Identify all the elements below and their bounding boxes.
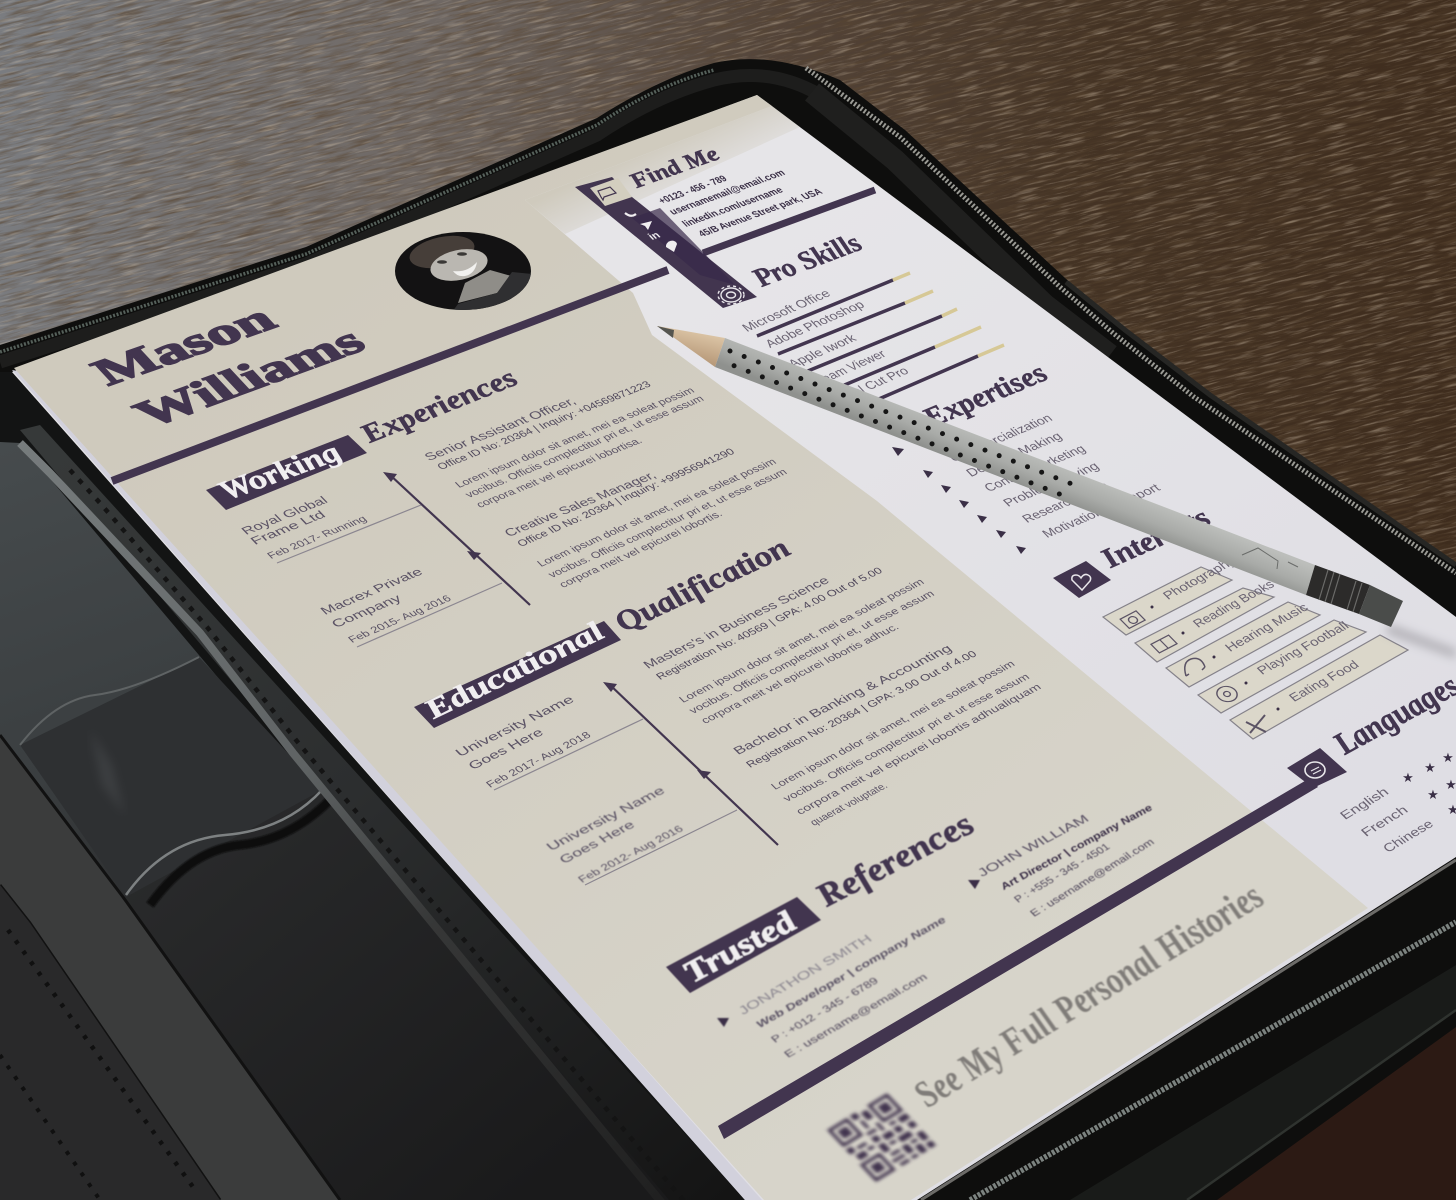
section heading: Working Experiences: Working	[209, 437, 349, 505]
education schools: Feb 2017- Aug 2018	[484, 730, 594, 790]
name: Mason Williams: Mason	[82, 298, 286, 393]
leather folder interior	[0, 372, 745, 1200]
strap	[0, 735, 340, 1200]
interest: hearing music	[1166, 600, 1320, 687]
main horizontal rule	[112, 270, 668, 481]
pencil dots	[727, 351, 1072, 497]
pro skills list: Final Cut Pro	[832, 364, 912, 405]
working details: corpora meit vel epicurei lobortisa.	[474, 436, 645, 510]
working companies: Frame Ltd	[247, 508, 329, 547]
reference: John William: E : username@email.com	[1028, 836, 1157, 919]
languages list: English	[1337, 785, 1392, 822]
education details: Registration No: 20364 | GPA: 3.00 Out of 4.00	[744, 649, 980, 770]
education schools: Feb 2012- Aug 2016	[576, 824, 686, 885]
reference: Jonathon Smith: Web Developer | company Name	[754, 915, 949, 1030]
zipper, right	[806, 68, 1456, 573]
education schools: University Name	[543, 784, 668, 853]
find me vertical band	[575, 177, 757, 308]
expertises list: Commercialization	[946, 411, 1055, 464]
name: Mason Williams	[82, 298, 375, 435]
working companies	[238, 494, 454, 645]
rating stars: ★	[1427, 787, 1439, 802]
education details	[640, 566, 1044, 828]
section heading: Educational Qualification: Qualification	[606, 532, 798, 637]
working details	[421, 380, 790, 590]
interest: playing football	[1198, 619, 1366, 713]
dark wood at bottom right corner	[1217, 1027, 1456, 1200]
pro skills list: Apple Iwork	[785, 331, 860, 370]
call to action: See My Full Personal Histories: See My Full Personal Histories	[903, 876, 1273, 1115]
expertises list: Content Marketing	[981, 442, 1089, 494]
paper edge	[12, 370, 762, 1200]
pro skills list: Microsoft Office	[739, 287, 833, 334]
pro skills list	[739, 273, 1004, 405]
section heading: Educational Qualification	[414, 532, 798, 728]
working details: Office ID No: 20364 | Inquiry: +04569871223	[435, 380, 654, 472]
reference: Jonathon Smith	[717, 915, 949, 1060]
pencil eraser	[1359, 585, 1403, 627]
working companies: Macrex Private	[317, 566, 426, 617]
icon: gear	[718, 286, 744, 304]
contact details: linkedin.com/username	[680, 186, 786, 229]
education details: vocibus. Officiis complectitur pri et ut esse assum	[781, 672, 1033, 804]
pencil body	[715, 338, 1315, 595]
working details: Office ID No: 20364 | Inquiry: +99956941290	[515, 447, 738, 549]
interest: eating food: Eating Food	[1286, 658, 1362, 704]
contact details: usernamemail@email.com	[667, 168, 788, 217]
education schools: Goes Here	[465, 726, 547, 772]
pencil shadow	[1385, 625, 1456, 658]
icon: heart box	[1053, 561, 1111, 598]
section heading: Trusted References	[666, 807, 983, 993]
education details: Lorem ipsum dolor sit amet, mei ea soleat possim	[677, 577, 927, 705]
education schools: Goes Here	[556, 818, 638, 866]
working companies: Feb 2017- Running	[265, 515, 370, 561]
interest: hearing music: Hearing Music	[1222, 600, 1312, 654]
interest: eating food	[1230, 635, 1408, 739]
icon: phone	[625, 213, 636, 216]
contact details	[656, 168, 826, 239]
section heading: Trusted References: References	[806, 807, 983, 913]
pen loop	[20, 657, 322, 897]
working details: Creative Sales Manager,	[501, 469, 659, 539]
working details: vocibus. Officiis complectitur pri et, ut esse assum	[546, 467, 790, 580]
working companies: Feb 2015- Aug 2016	[346, 594, 454, 645]
pencil tip	[657, 326, 725, 367]
heading: Expertises: Expertises	[913, 358, 1055, 432]
expertises list: Research Skills	[1019, 479, 1112, 525]
education details: corpora meit vel epicurei lobortis adhualiquam	[794, 682, 1044, 817]
contact details: +0123 - 456 - 789	[656, 174, 730, 206]
pro skills list: Adobe Photoshop	[762, 298, 867, 350]
profile photo	[395, 232, 531, 310]
education details: Registration No: 40569 | GPA: 4.00 Out of 5.00	[654, 566, 885, 682]
section heading: Trusted References: Trusted	[674, 905, 805, 988]
education details: Bachelor in Banking & Accounting	[730, 642, 955, 757]
find me rule	[703, 190, 875, 253]
folder seam, bottom right	[1070, 965, 1456, 1200]
working details: Senior Assistant Officer,	[421, 395, 579, 463]
expertises list: Motivational Support	[1039, 481, 1164, 540]
QR code	[827, 1093, 936, 1182]
languages list	[1337, 750, 1456, 855]
education details: Masters's in Business Science	[640, 574, 832, 671]
education schools	[452, 693, 686, 885]
name: Mason Williams: Williams	[123, 319, 375, 435]
rating stars	[1402, 750, 1456, 817]
working details: vocibus. Officiis complectitur pri et, ut esse assum	[463, 394, 707, 500]
reference: Jonathon Smith: JONATHON SMITH	[735, 932, 875, 1017]
pencil ferrule	[1306, 565, 1370, 614]
section heading: Working Experiences	[206, 364, 525, 510]
reference: John William: P : +555 - 345 - 4501	[1012, 842, 1113, 905]
interest: playing football: Playing Football	[1254, 619, 1352, 677]
languages list: French	[1358, 803, 1411, 839]
interests list	[1103, 554, 1408, 739]
reference: John William: Art Director | company Name	[997, 803, 1156, 893]
stitched band along paper	[20, 425, 745, 1200]
working timeline	[277, 472, 530, 647]
icon: linkedin: in	[646, 230, 664, 242]
rating stars: ★	[1402, 770, 1414, 785]
education schools: University Name	[452, 693, 577, 759]
rating stars: ★	[1442, 750, 1454, 765]
lower horizontal rule	[718, 778, 1318, 1139]
ribbed zipper tape, right	[812, 92, 1110, 355]
interest: photography: Photography	[1160, 554, 1239, 602]
icon: chat box	[1287, 748, 1347, 788]
expertises list: Decision Making	[963, 429, 1065, 479]
working details: corpora meit vel epicurei lobortis.	[557, 509, 725, 590]
pro skills list: Team Viewer	[812, 347, 890, 387]
pencil	[657, 326, 1456, 658]
expertises list	[892, 411, 1164, 554]
education details: quaerat voluptate.	[808, 781, 890, 828]
reference: Jonathon Smith: E : username@email.com	[782, 972, 930, 1060]
education details: Lorem ipsum dolor sit amet, mei ea soleat possim	[769, 659, 1018, 792]
heading: Find Me: Find Me	[622, 143, 726, 193]
zipper, top left	[0, 70, 714, 352]
working details: Lorem ipsum dolor sit amet, mei ea soleat possim	[453, 386, 697, 490]
expertises list: Problem Solving	[1000, 459, 1102, 509]
icon: send arrow	[640, 221, 652, 230]
icon: location pin	[666, 241, 677, 252]
zipper, bottom right	[970, 922, 1456, 1200]
education details: corpora meit vel epicurei lobortis adhuc.	[699, 622, 902, 726]
section heading: Educational Qualification: Educational	[415, 617, 613, 725]
pencil logo mark	[1242, 548, 1298, 569]
working companies: Royal Global	[238, 494, 331, 537]
reference: John William: JOHN WILLIAM	[974, 812, 1092, 879]
reference: Jonathon Smith: P : +012 - 345 - 6789	[769, 976, 881, 1045]
heading: Pro Skills: Pro Skills	[743, 229, 870, 292]
contact details: 45/B Avenue Street park, USA	[696, 187, 826, 239]
reference: John William	[968, 803, 1157, 919]
icon: message box	[590, 178, 632, 206]
interest: photography	[1103, 554, 1239, 635]
interest: reading books	[1135, 577, 1278, 662]
lower pocket	[123, 790, 680, 1200]
heading: Interests: Interests	[1091, 502, 1218, 574]
languages list: Chinese	[1380, 817, 1436, 855]
rating stars: ★	[1424, 760, 1436, 775]
working companies: Company	[328, 592, 405, 630]
education details: vocibus. Officiis complectitur pri et, ut esse assum	[687, 589, 938, 716]
working details: Lorem ipsum dolor sit amet, mei ea soleat possim	[535, 457, 779, 569]
interest: reading books: Reading Books	[1190, 577, 1278, 630]
education timeline	[494, 682, 778, 885]
section heading: Working Experiences: Experiences	[351, 364, 525, 449]
